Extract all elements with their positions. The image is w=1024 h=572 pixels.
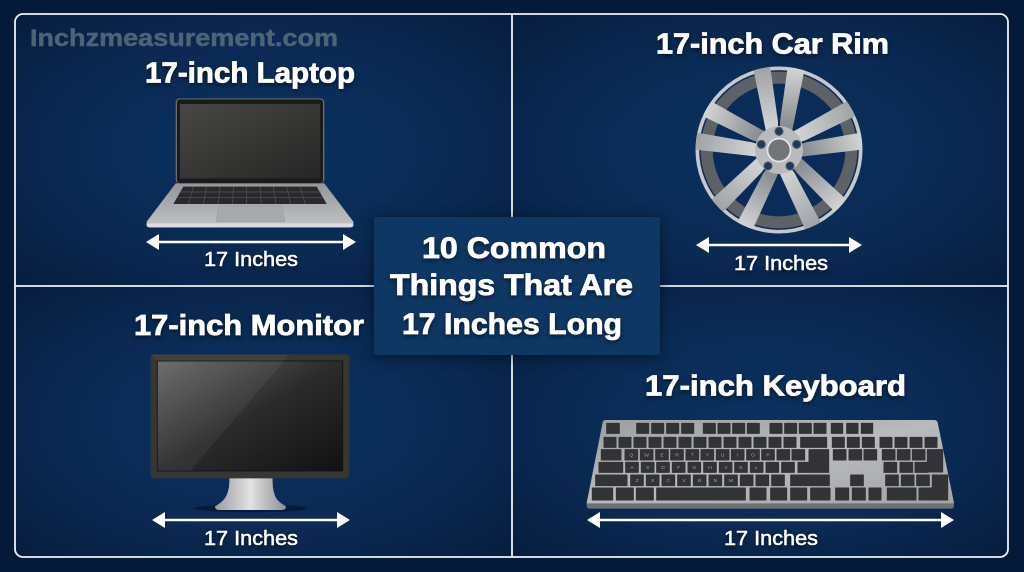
- icon: monitor: [151, 354, 349, 512]
- panel: laptop: [15, 14, 512, 286]
- heading: 17-inch Laptop: 17-inch Laptop: [145, 58, 355, 90]
- central title box: [374, 217, 660, 355]
- key legends: QWERTYUIOP: [629, 453, 770, 459]
- label: monitor 17 inches: 17 Inches: [204, 527, 298, 550]
- label: keyboard 17 inches: 17 Inches: [724, 527, 818, 550]
- arrow: keyboard width: [587, 512, 954, 528]
- icon: keyboard: [587, 420, 954, 509]
- arrow: rim width: [696, 237, 862, 253]
- icon: laptop: [147, 98, 353, 227]
- label: rim 17 inches: 17 Inches: [734, 252, 828, 275]
- label: laptop 17 inches: 17 Inches: [204, 248, 298, 271]
- key legends: ASDFGHJKL: [630, 465, 758, 471]
- arrow: monitor width: [152, 512, 350, 528]
- arrow: laptop width: [146, 234, 356, 250]
- panel: monitor: [15, 286, 512, 557]
- title: 17 Inches Long: [402, 308, 622, 341]
- key legends: ZXCVBNM: [635, 478, 733, 484]
- heading: 17-inch Car Rim: 17-inch Car Rim: [656, 28, 889, 60]
- title: 10 Common: [422, 232, 606, 265]
- key legends: [629, 453, 770, 484]
- heading: 17-inch Keyboard: 17-inch Keyboard: [645, 370, 906, 402]
- title: Things That Are: [390, 269, 633, 302]
- panel: keyboard: [512, 286, 1008, 557]
- icon: car rim: [693, 67, 865, 232]
- panel: car rim: [512, 14, 1008, 286]
- heading: 17-inch Monitor: 17-inch Monitor: [134, 310, 364, 342]
- title: [390, 232, 633, 341]
- watermark: Inchzmeasurement.com: [30, 25, 338, 52]
